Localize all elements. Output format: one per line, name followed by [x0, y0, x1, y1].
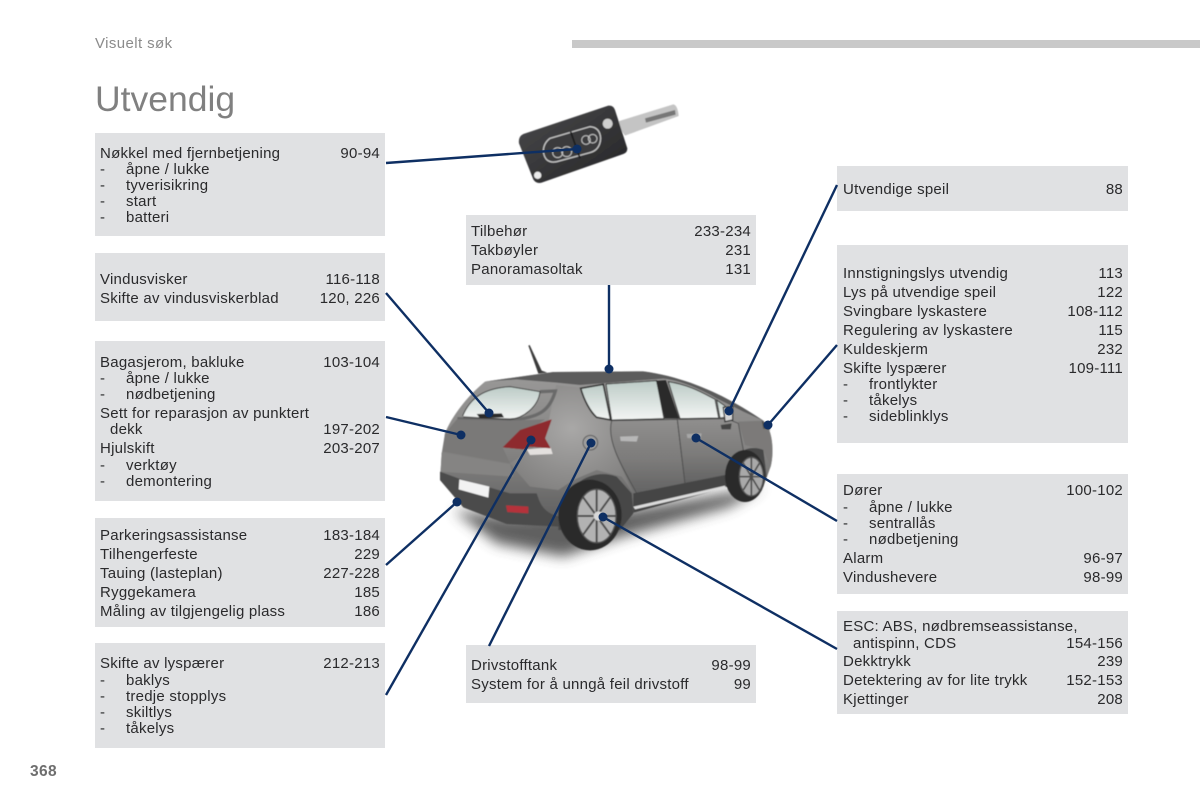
panel: boot: -	[100, 370, 105, 387]
panel: mirrors	[837, 166, 1128, 211]
lower reflector	[506, 505, 528, 513]
panel: lights: 115	[1098, 322, 1123, 339]
panel: ESC: antispinn, CDS	[853, 635, 956, 652]
panel: lights: Lys på utvendige speil	[843, 284, 996, 301]
panel: accessories	[466, 215, 756, 285]
fuel flap	[583, 435, 598, 450]
panel: rear bulbs: tredje stopplys	[126, 688, 226, 705]
panel: boot: 203-207	[323, 440, 380, 457]
panel: doors: nødbetjening	[869, 531, 959, 548]
panel: lights: sideblinklys	[869, 408, 949, 425]
panel: boot: åpne / lukke	[126, 370, 210, 387]
panel: parking: 183-184	[323, 527, 380, 544]
panel: ESC: 152-153	[1066, 672, 1123, 689]
panel: key: -	[100, 193, 105, 210]
panel: key: tyverisikring	[126, 177, 208, 194]
panel: ESC: 154-156	[1066, 635, 1123, 652]
panel: lights: tåkelys	[869, 392, 917, 409]
panel: accessories: 233-234	[694, 223, 751, 240]
tail lamp front	[503, 419, 552, 449]
panel: doors: -	[843, 515, 848, 532]
panel: wipers: 120, 226	[320, 290, 380, 307]
panel: boot: Sett for reparasjon av punktert	[100, 405, 309, 422]
panel: lights: 122	[1097, 284, 1123, 301]
panel: wipers: Skifte av vindusviskerblad	[100, 290, 279, 307]
panel: lights: -	[843, 408, 848, 425]
panel: boot	[95, 341, 385, 501]
panel: accessories: Takbøyler	[471, 242, 538, 259]
panel: boot: demontering	[126, 473, 212, 490]
arrow: ESC	[598, 512, 837, 649]
panel: parking: Tilhengerfeste	[100, 546, 198, 563]
panel: doors	[837, 474, 1128, 594]
panel: doors: sentrallås	[869, 515, 936, 532]
side windows	[581, 384, 611, 420]
panel: key: Nøkkel med fjernbetjening	[100, 145, 280, 162]
panel: parking: 229	[354, 546, 380, 563]
panel: boot: -	[100, 386, 105, 403]
rear door	[611, 419, 685, 493]
bumper	[440, 472, 563, 527]
panel: parking: 185	[354, 584, 380, 601]
panel: doors: Vindushevere	[843, 569, 937, 586]
panel: boot: dekk	[110, 421, 143, 438]
panel: parking: Parkeringsassistanse	[100, 527, 247, 544]
panel: lights: 109-111	[1068, 360, 1123, 377]
mirror	[723, 407, 733, 422]
panel: lights: 108-112	[1067, 303, 1123, 320]
panel: parking	[95, 518, 385, 627]
panel: accessories: Tilbehør	[471, 223, 527, 240]
panel: boot: -	[100, 473, 105, 490]
panel: boot: -	[100, 457, 105, 474]
panel: key	[95, 133, 385, 236]
panel: mirrors: Utvendige speil	[843, 181, 949, 198]
panel: doors: Alarm	[843, 550, 883, 567]
panel: fuel: 99	[734, 676, 751, 693]
panel: key: åpne / lukke	[126, 161, 210, 178]
panel: fuel	[466, 645, 756, 703]
headlamp edge	[762, 420, 771, 430]
car shadow	[453, 487, 763, 557]
panel: boot: nødbetjening	[126, 386, 216, 403]
panel: key: 90-94	[340, 145, 380, 162]
panel: parking: 186	[354, 603, 380, 620]
panel: wipers	[95, 253, 385, 321]
panel: doors: -	[843, 499, 848, 516]
arrow: lights	[764, 345, 837, 430]
arrow: key	[386, 144, 582, 163]
panel: rear bulbs: -	[100, 672, 105, 689]
panel: lights: -	[843, 376, 848, 393]
panel: rear bulbs: baklys	[126, 672, 170, 689]
panel: lights: Innstigningslys utvendig	[843, 265, 1008, 282]
panel: lights: Skifte lyspærer	[843, 360, 947, 377]
panel: parking: Måling av tilgjengelig plass	[100, 603, 285, 620]
panel: ESC: ESC: ABS, nødbremseassistanse,	[843, 618, 1078, 635]
panel: fuel: Drivstofftank	[471, 657, 557, 674]
illustration: car	[440, 345, 772, 557]
arrow: parking	[386, 498, 462, 565]
rear wheel arch	[558, 474, 633, 530]
front wheel arch	[725, 448, 767, 490]
front wheel	[725, 450, 765, 502]
arrow: doors	[692, 434, 837, 521]
panel: rear bulbs: skiltlys	[126, 704, 172, 721]
panel: ESC: Detektering av for lite trykk	[843, 672, 1028, 689]
panel: ESC: 239	[1097, 653, 1123, 670]
panel: accessories: 231	[725, 242, 751, 259]
panel: accessories: 131	[725, 261, 751, 278]
panel: boot: verktøy	[126, 457, 177, 474]
tailgate lower band	[441, 453, 513, 477]
tail lamp	[503, 419, 552, 449]
panel: wipers: 116-118	[325, 271, 380, 288]
page number: 368	[30, 763, 57, 780]
title: Utvendig	[95, 79, 235, 119]
tailgate	[443, 419, 545, 463]
arrow: rear bulbs	[386, 436, 536, 695]
panel: key: -	[100, 177, 105, 194]
panel: lights: Regulering av lyskastere	[843, 322, 1013, 339]
door sill	[633, 473, 737, 513]
arrow: fuel	[489, 438, 596, 646]
panel: fuel: System for å unngå feil drivstoff	[471, 676, 689, 693]
panel: lights: -	[843, 392, 848, 409]
panel: rear bulbs: tåkelys	[126, 720, 174, 737]
panel: doors: Dører	[843, 482, 883, 499]
front door	[677, 419, 743, 483]
wiper	[477, 413, 504, 418]
panel: doors: åpne / lukke	[869, 499, 953, 516]
panel: doors: 98-99	[1083, 569, 1123, 586]
panel: parking: Ryggekamera	[100, 584, 196, 601]
panel: lights: Kuldeskjerm	[843, 341, 928, 358]
panel: rear bulbs: Skifte av lyspærer	[100, 655, 224, 672]
panel: key: -	[100, 209, 105, 226]
door handles	[620, 436, 638, 442]
panel: ESC	[837, 611, 1128, 714]
number plate	[459, 479, 489, 498]
panel: lights: 232	[1097, 341, 1123, 358]
panel: parking: 227-228	[323, 565, 380, 582]
panel: ESC: Kjettinger	[843, 691, 909, 708]
panel: accessories: Panoramasoltak	[471, 261, 583, 278]
arrow: accessories	[604, 285, 614, 374]
panel: mirrors: 88	[1106, 181, 1123, 198]
front wing	[738, 421, 772, 467]
panel: parking: Tauing (lasteplan)	[100, 565, 223, 582]
rear quarter panel	[510, 385, 633, 493]
panel: doors: 100-102	[1066, 482, 1123, 499]
panel: boot: Hjulskift	[100, 440, 155, 457]
arrow: mirrors	[724, 185, 837, 416]
panel: fuel: 98-99	[711, 657, 751, 674]
body shell	[440, 371, 772, 527]
arrow: wipers	[386, 293, 494, 418]
arrow: boot	[386, 417, 466, 440]
panel: wipers: Vindusvisker	[100, 271, 188, 288]
antenna	[528, 345, 547, 374]
section label: Visuelt søk	[95, 35, 172, 52]
panel: rear bulbs: -	[100, 704, 105, 721]
panel: rear bulbs: -	[100, 688, 105, 705]
panel: lights: Svingbare lyskastere	[843, 303, 987, 320]
panel: doors: -	[843, 531, 848, 548]
rear window frame	[457, 391, 555, 420]
panel: rear bulbs	[95, 643, 385, 748]
rear window	[463, 387, 540, 419]
panel: key: start	[126, 193, 156, 210]
panel: boot: 103-104	[323, 354, 380, 371]
header bar	[572, 40, 1200, 48]
icon: remote key	[519, 104, 679, 183]
panel: doors: 96-97	[1083, 550, 1123, 567]
panel: rear bulbs: 212-213	[323, 655, 380, 672]
rear wheel	[558, 480, 622, 550]
panel: boot: 197-202	[323, 421, 380, 438]
panel: key: batteri	[126, 209, 169, 226]
panel: boot: Bagasjerom, bakluke	[100, 354, 245, 371]
panel: lights	[837, 245, 1128, 443]
panel: lights: frontlykter	[869, 376, 938, 393]
roof	[485, 371, 763, 421]
panel: ESC: Dekktrykk	[843, 653, 911, 670]
panel: lights: 113	[1098, 265, 1123, 282]
panel: key: -	[100, 161, 105, 178]
panel: rear bulbs: -	[100, 720, 105, 737]
panel: ESC: 208	[1097, 691, 1123, 708]
